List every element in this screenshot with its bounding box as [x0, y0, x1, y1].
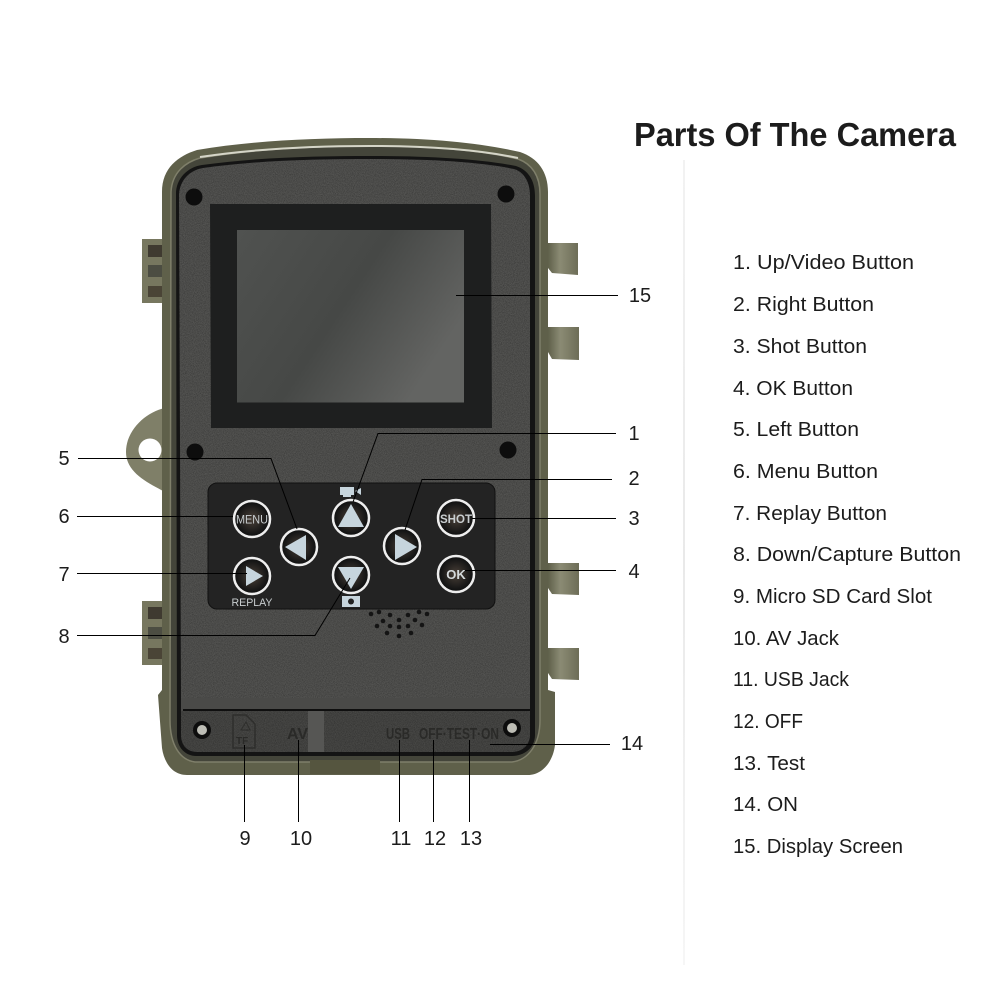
callout numbers: 13 — [460, 828, 482, 850]
hanging lug — [126, 408, 165, 492]
parts list: 1. Up/Video Button — [733, 252, 914, 274]
callout numbers: 5 — [58, 448, 70, 470]
button: ok — [438, 556, 474, 592]
screws — [186, 186, 521, 739]
panel lower plate shadow — [181, 698, 530, 711]
parts list: 8. Down/Capture Button — [733, 544, 961, 566]
bottom engraved text: AV — [287, 726, 308, 743]
housing highlight rim — [170, 146, 540, 762]
parts list: 9. Micro SD Card Slot — [733, 586, 932, 608]
callout numbers: 1 — [628, 423, 640, 445]
button: shot — [438, 500, 474, 536]
camera photo — [126, 138, 579, 775]
title: Parts Of The Camera — [634, 116, 957, 153]
parts list — [733, 252, 961, 858]
LCD screen — [237, 230, 464, 402]
parts list: 6. Menu Button — [733, 461, 878, 483]
button: menu: MENU — [236, 512, 268, 526]
outer housing — [158, 138, 555, 775]
front panel — [179, 159, 530, 698]
parts list: 15. Display Screen — [733, 836, 903, 858]
left mounting clips — [142, 239, 164, 665]
top seal highlight — [200, 146, 518, 158]
parts list: 13. Test — [733, 753, 805, 775]
callout numbers: 9 — [239, 828, 251, 850]
bottom engraved text: TF — [236, 736, 248, 747]
button: down — [333, 557, 369, 593]
button: ok: OK — [446, 567, 466, 582]
button: up — [333, 500, 369, 536]
lug hole — [138, 438, 162, 462]
video icon — [340, 487, 361, 497]
right mounting clips — [548, 243, 579, 680]
parts list: 5. Left Button — [733, 419, 859, 441]
button: shot: SHOT — [440, 512, 473, 526]
callout numbers: 6 — [58, 506, 70, 528]
callout numbers: 4 — [628, 561, 640, 583]
bottom engraved text — [233, 715, 499, 748]
parts list: 7. Replay Button — [733, 503, 887, 525]
callout numbers: 11 — [391, 828, 411, 850]
callout numbers: 8 — [58, 626, 70, 648]
bottom engraved text: USB — [386, 726, 410, 743]
callout lines — [77, 296, 618, 822]
parts list: 12. OFF — [733, 711, 803, 733]
button: left — [281, 529, 317, 565]
bottom engraved text: OFF·TEST·ON — [419, 726, 499, 743]
housing bottom marking — [310, 760, 380, 774]
replay label: REPLAY — [232, 597, 273, 609]
bottom strip — [181, 711, 530, 752]
parts list: 2. Right Button — [733, 294, 874, 316]
speaker holes — [369, 610, 429, 638]
callout numbers: 3 — [628, 508, 640, 530]
keypad — [208, 483, 495, 609]
camera icon — [342, 596, 360, 607]
callout numbers: 15 — [629, 285, 651, 307]
callout numbers — [58, 285, 651, 850]
black gasket — [176, 156, 535, 756]
parts list: 3. Shot Button — [733, 336, 867, 358]
parts list: 14. ON — [733, 794, 798, 816]
divider — [683, 160, 685, 965]
button: right — [384, 528, 420, 564]
parts list: 11. USB Jack — [733, 669, 850, 691]
parts list: 4. OK Button — [733, 378, 853, 400]
callout numbers: 12 — [424, 828, 446, 850]
screen bezel — [210, 204, 492, 428]
callout numbers: 10 — [290, 828, 312, 850]
button: menu — [234, 501, 270, 537]
parts list: 10. AV Jack — [733, 628, 840, 650]
callout numbers: 14 — [621, 733, 643, 755]
callout numbers: 7 — [58, 564, 70, 586]
button: replay — [234, 558, 270, 594]
callout numbers: 2 — [628, 468, 640, 490]
